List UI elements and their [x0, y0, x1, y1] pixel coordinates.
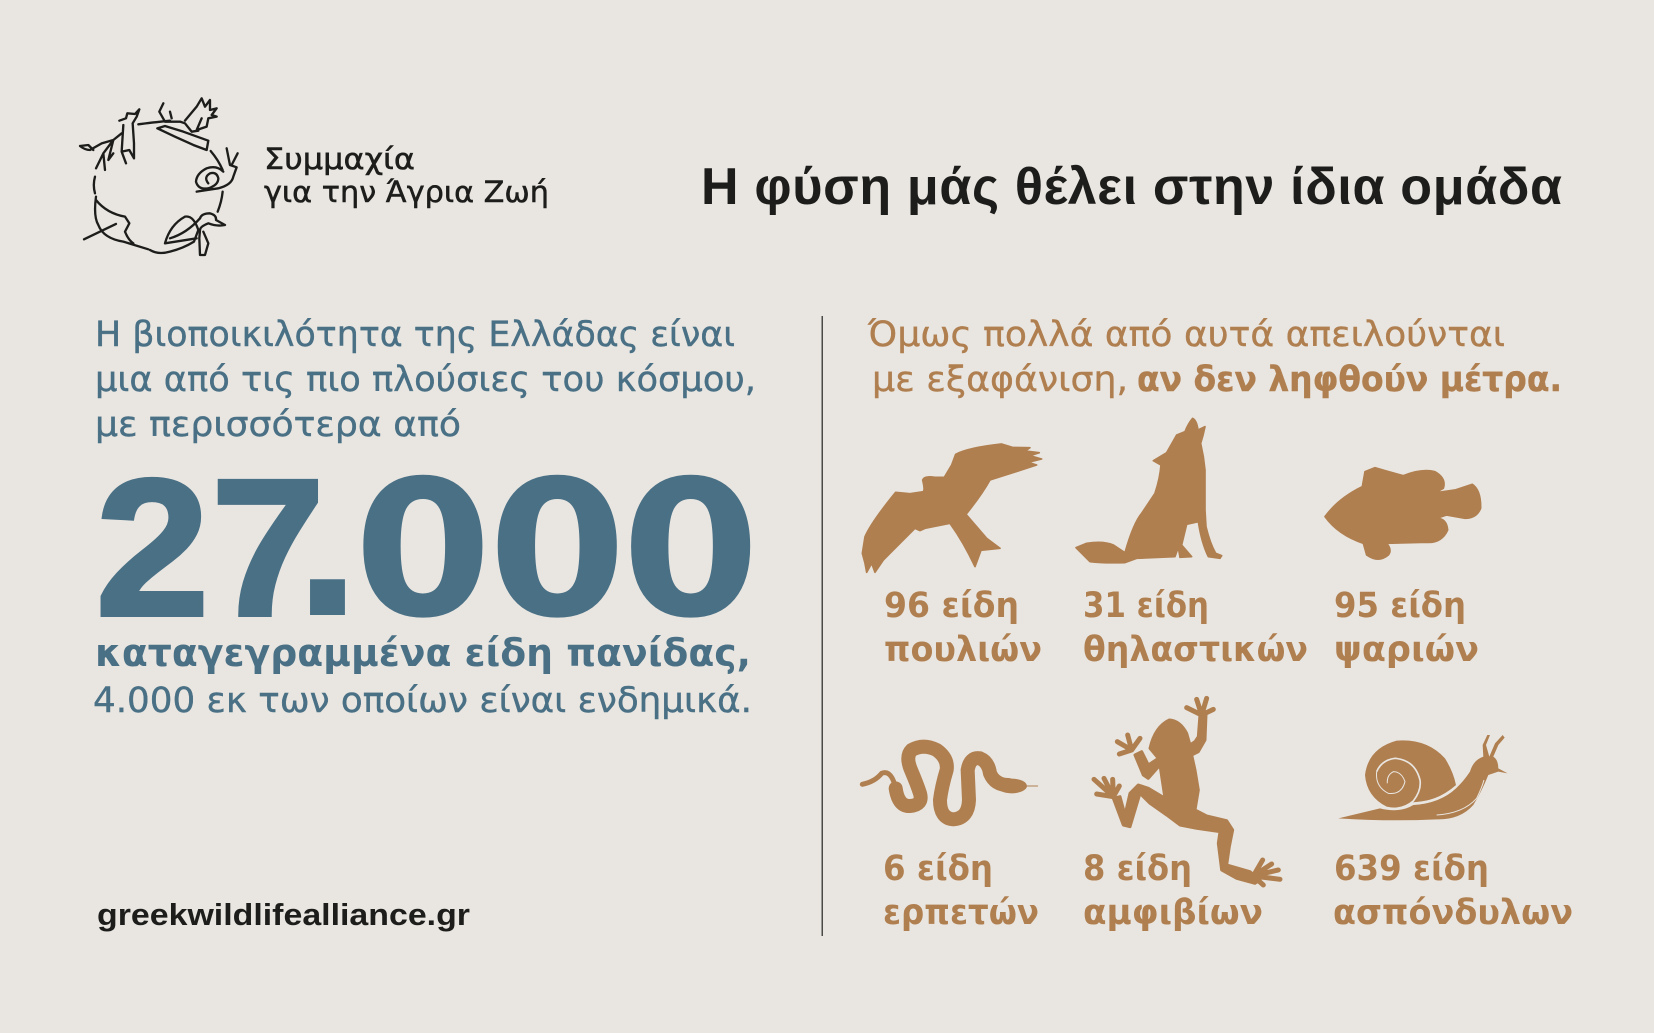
divider line [822, 316, 823, 936]
website url: greekwildlifealliance.gr [97, 897, 470, 932]
threat statement: με εξαφάνιση, [872, 360, 1128, 400]
label: birds: 96 είδη [884, 586, 1019, 626]
label: fish: 95 είδη [1334, 586, 1466, 626]
species: reptiles [862, 747, 1039, 933]
icon: frog [1094, 698, 1280, 885]
label: invertebrates [1333, 849, 1573, 933]
threat statement: Όμως πολλά από αυτά απειλούνται [867, 315, 1505, 355]
caption bold: καταγεγραμμένα είδη πανίδας, [95, 631, 751, 675]
label: reptiles: ερπετών [883, 893, 1039, 933]
big number: 27.000 [96, 439, 760, 660]
icon: snail [1338, 735, 1508, 820]
logo wordmark [264, 142, 549, 209]
panel: biodiversity intro and big number [93, 315, 760, 721]
title: Η φύση μάς θέλει στην ίδια ομάδα [701, 158, 1562, 216]
threat statement: αν δεν ληφθούν μέτρα. [1137, 360, 1562, 400]
logo: Συμμαχία για την Άγρια Ζωή [80, 98, 549, 255]
label: mammals [1083, 586, 1308, 670]
logo wordmark: Συμμαχία [264, 142, 415, 176]
species: fish [1325, 468, 1481, 670]
icon: howling wolf [1076, 418, 1222, 563]
logo wordmark: για την Άγρια Ζωή [264, 175, 549, 209]
label: fish [1334, 586, 1479, 670]
intro text: Η βιοποικιλότητα της Ελλάδας είναι [95, 315, 735, 355]
label: amphibians: αμφιβίων [1083, 893, 1263, 933]
label: mammals: 31 είδη [1083, 586, 1209, 626]
label: amphibians [1083, 849, 1263, 933]
caption regular: 4.000 εκ των οποίων είναι ενδημικά. [93, 681, 752, 721]
intro text: με περισσότερα από [95, 405, 461, 445]
label: fish: ψαριών [1334, 630, 1479, 670]
species: birds [862, 444, 1042, 670]
panel: threatened species [862, 315, 1573, 933]
icon: snake [862, 747, 1038, 819]
label: birds: πουλιών [884, 630, 1042, 670]
threat statement [867, 315, 1562, 400]
icon: bird of prey [862, 444, 1042, 572]
label: reptiles: 6 είδη [883, 849, 993, 889]
intro text: μια από τις πιο πλούσιες του κόσμου, [95, 360, 756, 400]
species: mammals [1076, 418, 1308, 670]
label: birds [884, 586, 1042, 670]
intro text [95, 315, 756, 445]
species: amphibians [1083, 698, 1280, 933]
species: invertebrates [1333, 735, 1573, 933]
label: amphibians: 8 είδη [1083, 849, 1192, 889]
label: invertebrates: ασπόνδυλων [1333, 893, 1573, 933]
icon: circle of animals line drawing [80, 98, 238, 255]
label: invertebrates: 639 είδη [1334, 849, 1489, 889]
icon: clownfish [1325, 468, 1481, 559]
label: reptiles [883, 849, 1039, 933]
label: mammals: θηλαστικών [1083, 630, 1308, 670]
